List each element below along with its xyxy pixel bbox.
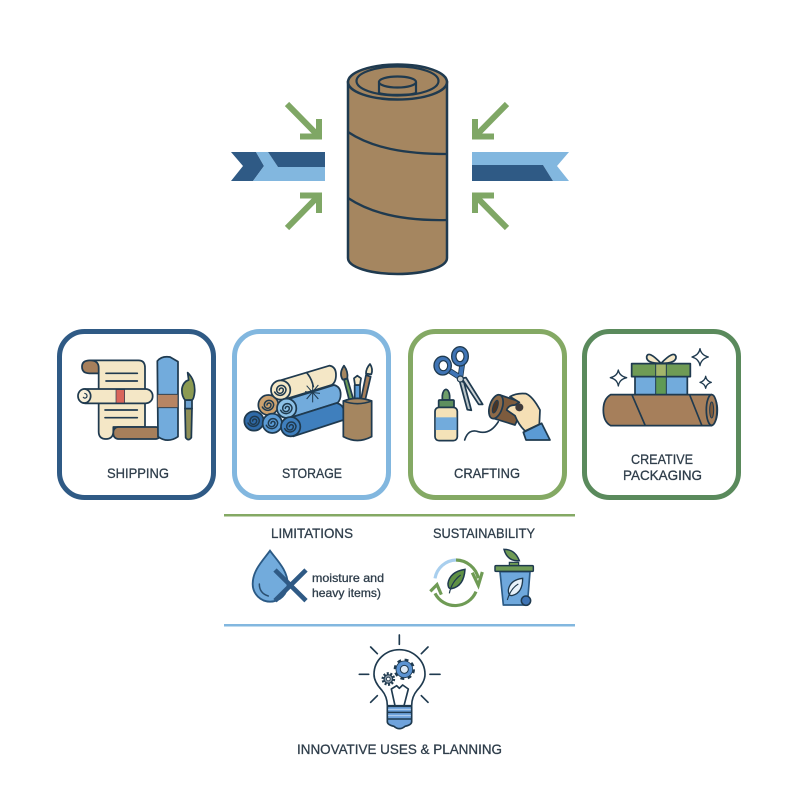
icon: water drop crossed out	[253, 551, 306, 602]
heading: limitations: LIMITATIONS	[271, 525, 353, 541]
label: shipping: SHIPPING	[107, 465, 169, 481]
section: limitations	[253, 525, 384, 602]
icon: scissors, glue, tube and hand	[434, 347, 550, 441]
section: sustainability	[430, 525, 536, 606]
panel: creative packaging	[584, 332, 738, 498]
heading: sustainability: SUSTAINABILITY	[433, 525, 536, 541]
panel: shipping	[60, 332, 214, 498]
icon: recycling bin with leaf	[495, 549, 533, 605]
text: limitations note: heavy items)	[312, 586, 381, 600]
label: creative packaging: PACKAGING	[623, 467, 702, 483]
panel: crafting	[410, 332, 564, 498]
icon: cardboard tube	[348, 64, 447, 274]
icon: recycling loop with leaf	[430, 560, 482, 606]
text: limitations note	[312, 571, 384, 600]
compression arrows	[287, 104, 507, 228]
label: creative packaging	[623, 451, 702, 483]
label: crafting: CRAFTING	[454, 465, 520, 481]
icon: light bulb with gears	[359, 635, 440, 729]
section: innovative uses and planning	[297, 635, 502, 757]
label: creative packaging: CREATIVE	[631, 451, 693, 467]
icon: rolls and brush cup	[244, 364, 372, 440]
label: storage: STORAGE	[282, 465, 342, 481]
hero illustration: cardboard tube with ribbons and arrows	[231, 64, 569, 274]
label: innovative uses and planning: INNOVATIVE USES & PLANNING	[297, 741, 502, 757]
icon: gift on tube with sparkles	[603, 349, 717, 426]
right ribbon	[472, 152, 569, 181]
panel: storage	[234, 332, 388, 498]
text: limitations note: moisture and	[312, 571, 384, 585]
icon: scrolls and brush	[78, 357, 195, 440]
left ribbon	[231, 152, 325, 181]
